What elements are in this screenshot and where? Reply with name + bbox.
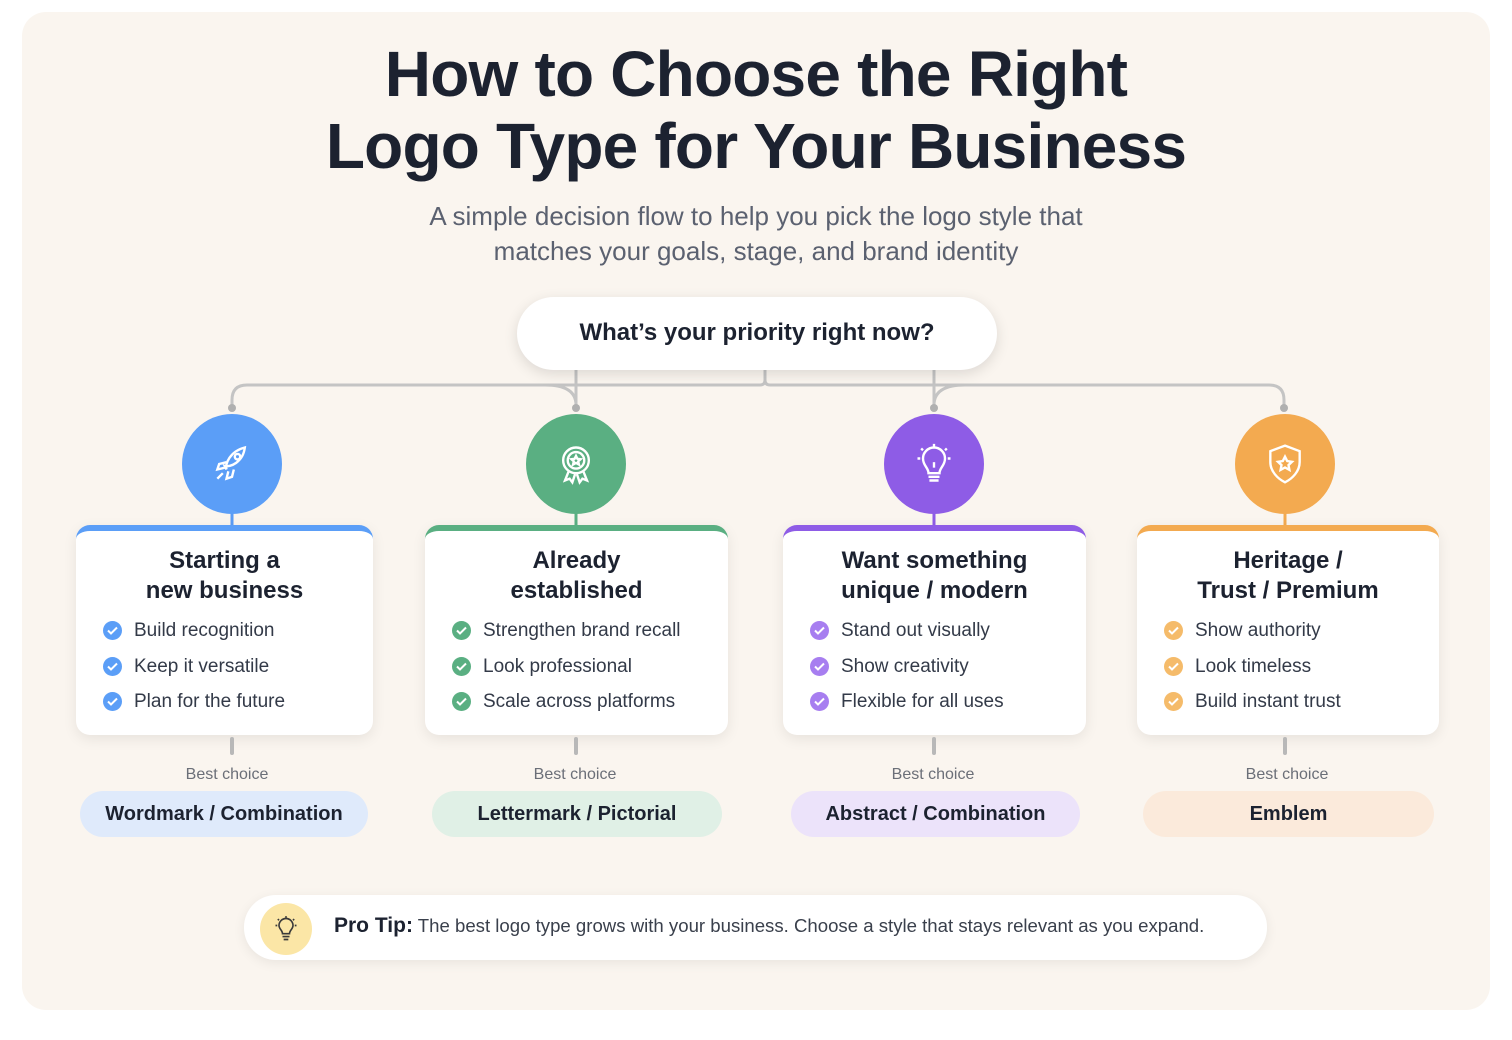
best choice label 4: Best choice bbox=[1246, 766, 1328, 783]
checklist: Look timeless bbox=[1195, 656, 1311, 676]
result pill: wordmark: Wordmark / Combination bbox=[105, 803, 343, 825]
title: Logo Type for Your Business bbox=[326, 110, 1186, 182]
checklist: Build recognition bbox=[134, 620, 274, 641]
card heading: Starting a bbox=[169, 547, 280, 574]
best choice label 2: Best choice bbox=[534, 766, 616, 783]
checklist: Show creativity bbox=[841, 656, 969, 676]
checklist bbox=[1164, 620, 1341, 712]
title: How to Choose the Right bbox=[385, 38, 1127, 110]
checklist: Keep it versatile bbox=[134, 656, 269, 676]
checklist: Scale across platforms bbox=[483, 691, 675, 712]
card heading bbox=[510, 547, 643, 604]
panel: already established bbox=[425, 525, 728, 735]
tip text: Pro Tip: The best logo type grows with your business. Choose a style that stays relevant as you expand. bbox=[334, 914, 1204, 937]
best choice label 1: Best choice bbox=[186, 766, 268, 783]
panel: unique modern bbox=[783, 525, 1086, 735]
checklist: Plan for the future bbox=[134, 691, 285, 712]
result pill: abstract: Abstract / Combination bbox=[825, 803, 1046, 825]
result pill: lettermark: Lettermark / Pictorial bbox=[478, 803, 676, 825]
card heading: Trust / Premium bbox=[1197, 577, 1379, 604]
card heading bbox=[1197, 547, 1379, 604]
checklist bbox=[103, 620, 285, 712]
subtitle: matches your goals, stage, and brand identity bbox=[494, 236, 1018, 266]
best choice label 3: Best choice bbox=[892, 766, 974, 783]
checklist: Build instant trust bbox=[1195, 691, 1341, 712]
checklist: Flexible for all uses bbox=[841, 691, 1004, 712]
connector lines bbox=[228, 370, 1288, 525]
icon: lightbulb bbox=[884, 414, 984, 514]
result pill: emblem: Emblem bbox=[1250, 803, 1327, 825]
checklist: Strengthen brand recall bbox=[483, 620, 681, 641]
checklist bbox=[810, 620, 1004, 712]
card heading: unique / modern bbox=[841, 577, 1028, 604]
panel: heritage trust premium bbox=[1137, 525, 1439, 735]
icon: award bbox=[526, 414, 626, 514]
checklist: Look professional bbox=[483, 656, 632, 676]
result pill: wordmark bbox=[80, 791, 368, 837]
checklist: Show authority bbox=[1195, 620, 1321, 641]
card heading bbox=[146, 547, 303, 604]
result pill: emblem bbox=[1143, 791, 1434, 837]
card heading: Want something bbox=[842, 547, 1027, 574]
question pill bbox=[517, 297, 997, 370]
title bbox=[326, 38, 1186, 182]
icon: rocket bbox=[182, 414, 282, 514]
result pill: lettermark bbox=[432, 791, 722, 837]
checklist: Stand out visually bbox=[841, 620, 990, 641]
card heading: new business bbox=[146, 577, 303, 604]
result pill: abstract bbox=[791, 791, 1080, 837]
subtitle: A simple decision flow to help you pick the logo style that bbox=[429, 201, 1083, 231]
question pill: What’s your priority right now? bbox=[579, 319, 935, 346]
card heading: established bbox=[510, 577, 643, 604]
icon: tip bulb bbox=[260, 903, 312, 955]
card heading bbox=[841, 547, 1028, 604]
subtitle bbox=[429, 201, 1083, 266]
card heading: Already bbox=[532, 547, 621, 574]
card heading: Heritage / bbox=[1233, 547, 1343, 574]
icon: shield bbox=[1235, 414, 1335, 514]
pro tip callout bbox=[244, 895, 1267, 960]
panel: starting a new business bbox=[76, 525, 373, 735]
checklist bbox=[452, 620, 681, 712]
